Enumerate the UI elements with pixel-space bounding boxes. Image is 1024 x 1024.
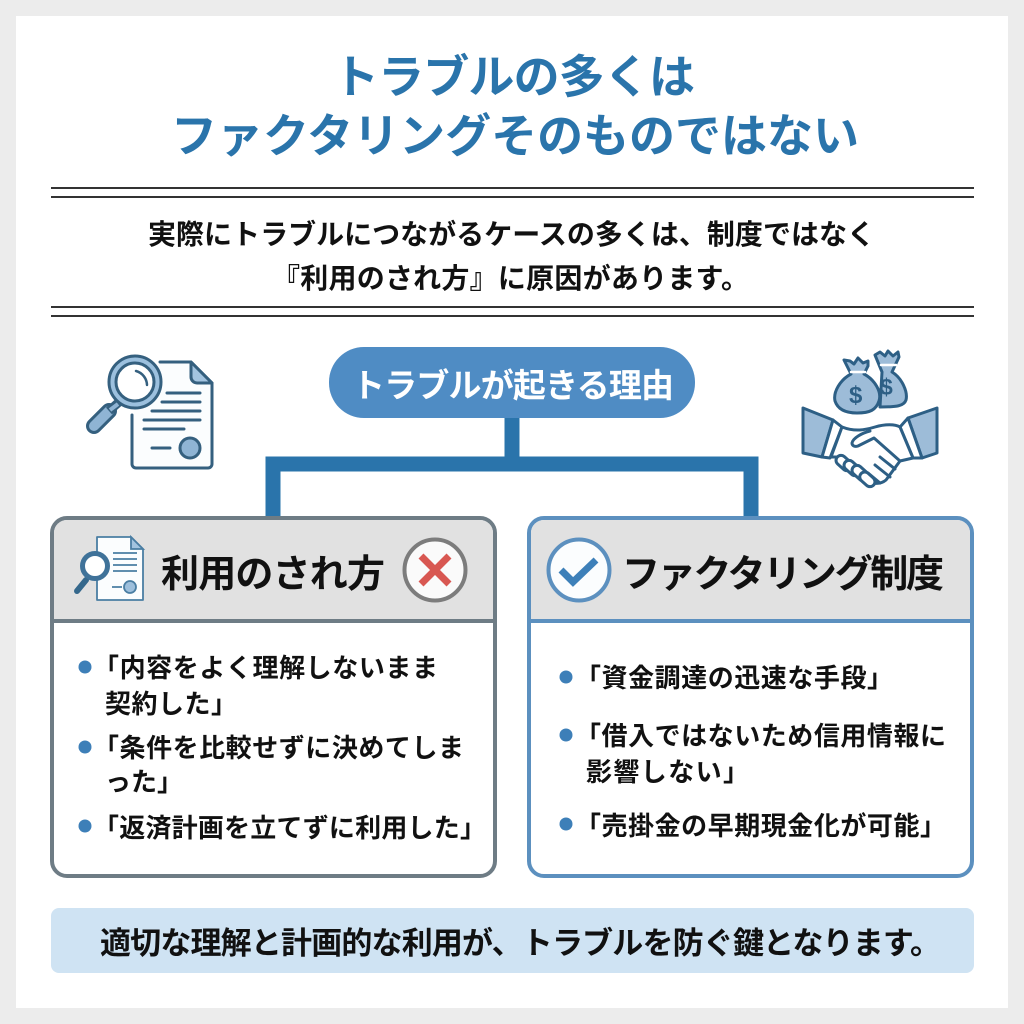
intro text [148,218,875,294]
bullet list: 「内容をよく理解しないまま [93,653,438,683]
bullet list [78,653,486,843]
title: トラブルの多くは [333,51,695,103]
bullet list: 影響しない」 [586,757,749,787]
bullet list [560,663,946,841]
callout: 適切な理解と計画的な利用が、トラブルを防ぐ鍵となります。 [100,926,941,961]
panel: factoring system [529,518,972,876]
bullet list: 「借入ではないため信用情報に [575,721,946,751]
title: ファクタリングそのものではない [171,110,859,162]
icon: cross mark [404,540,466,600]
text: $ [880,374,893,400]
panel heading: 利用のされ方 [161,554,385,596]
main pill: reasons: トラブルが起きる理由 [352,367,674,404]
intro text: 『利用のされ方』に原因があります。 [272,262,749,294]
bullet list: 「返済計画を立てずに利用した」 [93,813,486,843]
icon: money bags and handshake [803,351,937,489]
bullet list: 「資金調達の迅速な手段」 [575,663,893,693]
panel: how it is used [52,518,495,876]
panel header [531,520,970,620]
bullet list: 「条件を比較せずに決めてしま [93,733,464,763]
title [171,51,859,162]
panel header [54,520,493,620]
bullet list: 契約した」 [105,689,237,719]
icon: small document search [77,537,143,600]
bullet list: 「売掛金の早期現金化が可能」 [575,811,946,841]
bullet list: った」 [105,767,183,797]
connector lines [273,415,751,520]
main pill: reasons [329,347,695,418]
text: $ [849,382,863,409]
icon: document with magnifying glass [94,356,212,468]
icon: check mark [548,540,610,600]
callout [51,908,974,973]
panel heading: ファクタリング制度 [622,554,944,596]
intro text: 実際にトラブルにつながるケースの多くは、制度ではなく [148,218,875,250]
